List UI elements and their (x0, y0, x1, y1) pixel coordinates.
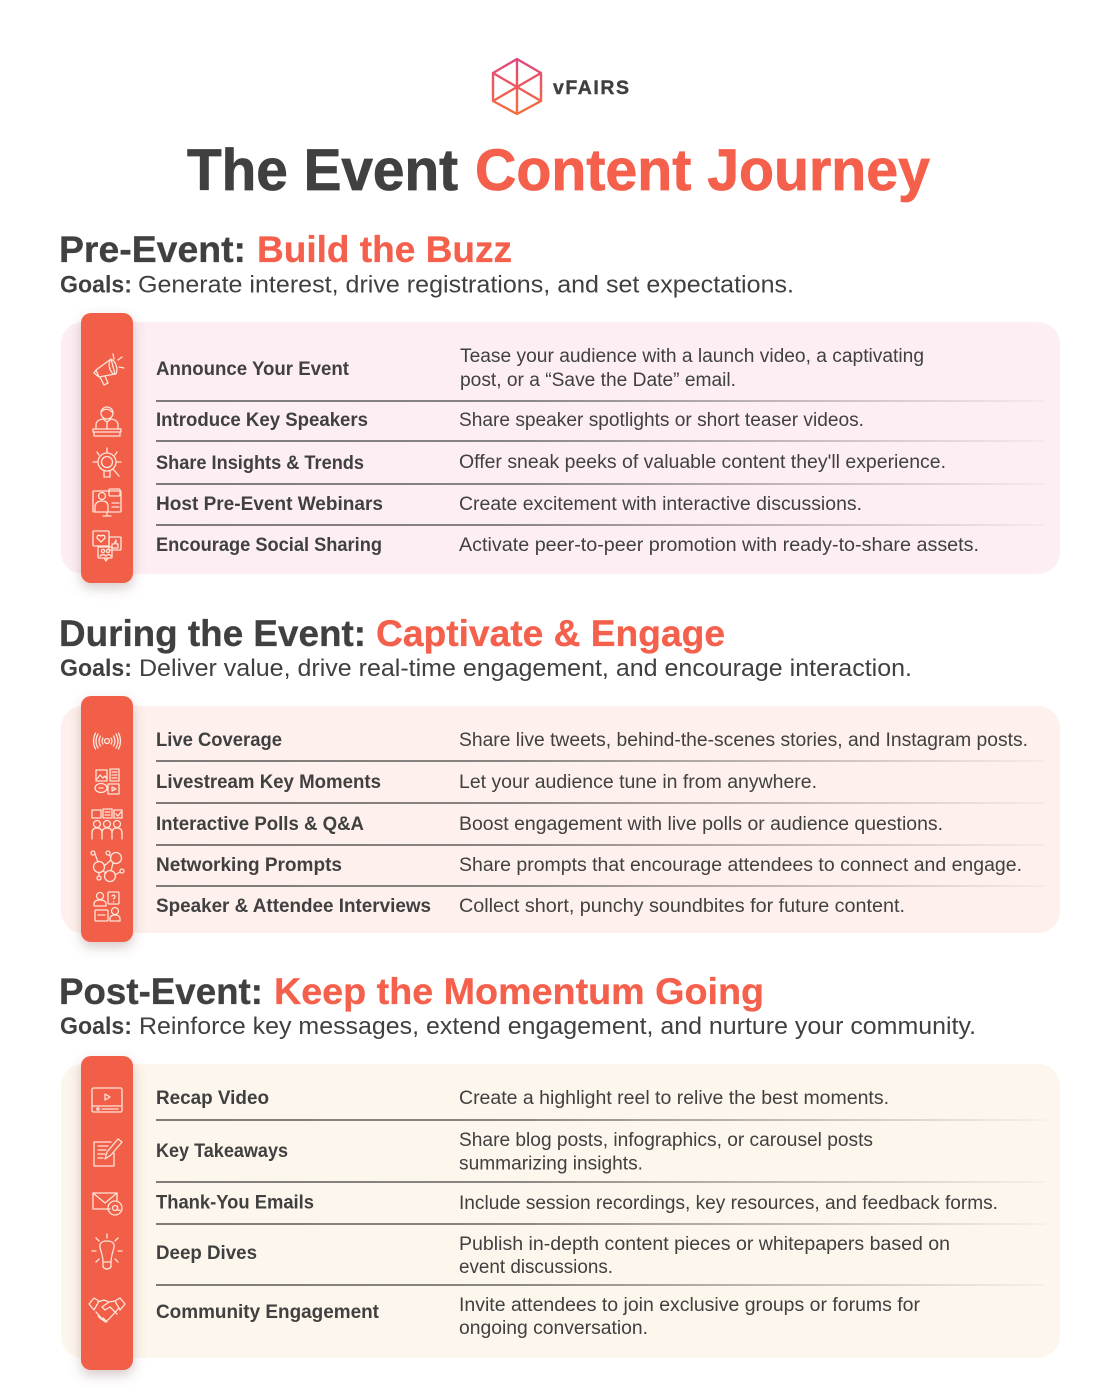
row: announce your event: post, or a “Save the Date” email. (460, 370, 736, 391)
row: recap video: Create a highlight reel to relive the best moments. (459, 1088, 889, 1109)
row: interactive polls: Boost engagement with live polls or audience questions. (459, 814, 943, 835)
goals: pre-event: Generate interest, drive registrations, and set expectations. (138, 272, 794, 298)
icon: recap video (92, 1088, 122, 1112)
icon: insight bulb (93, 448, 121, 477)
row: community engagement: Community Engagement (156, 1302, 380, 1323)
row: share insights and trends: Share Insights & Trends (156, 453, 364, 474)
panel: pre-event (61, 313, 1060, 583)
row: encourage social sharing (156, 535, 979, 556)
section heading: post-event: Post-Event: (59, 971, 263, 1012)
section heading: during the event: During the Event: (59, 613, 366, 654)
row: livestream key moments: Let your audience tune in from anywhere. (459, 772, 817, 793)
section heading: post-event: Keep the Momentum Going (274, 971, 764, 1012)
row: live coverage (156, 730, 1028, 751)
row: speaker and attendee interviews: Collect short, punchy soundbites for future content. (459, 896, 905, 917)
icon: webinar screen (93, 489, 121, 516)
row: thank-you emails: Thank-You Emails (156, 1192, 314, 1214)
row: announce your event: Tease your audience with a launch video, a captivating (460, 346, 924, 367)
row: introduce key speakers: Introduce Key Speakers (156, 410, 368, 431)
icon: speaker interviews (94, 892, 120, 921)
row: livestream key moments (156, 772, 817, 793)
row: networking prompts: Share prompts that encourage attendees to connect and engage. (459, 855, 1022, 876)
goals: pre-event: Goals: (60, 272, 132, 298)
icon: social sharing (93, 531, 121, 561)
icon: megaphone (94, 354, 124, 385)
row: live coverage: Live Coverage (156, 730, 282, 751)
row: deep dives: Deep Dives (156, 1243, 257, 1264)
icon: hexagon logo mark (493, 59, 541, 114)
logo: vFairs (493, 59, 629, 114)
icon bar (81, 696, 133, 942)
icon: polls and audience (92, 809, 122, 839)
row: key takeaways (156, 1130, 873, 1174)
goals: post-event: Goals: (60, 1013, 132, 1040)
icon: email (93, 1193, 122, 1215)
icon: handshake (89, 1298, 125, 1322)
icon: live broadcast signal (94, 733, 120, 749)
row: deep dives: event discussions. (459, 1257, 613, 1278)
icon: light bulb (92, 1234, 122, 1269)
row: thank-you emails (156, 1192, 998, 1214)
row: livestream key moments: Livestream Key Moments (156, 772, 381, 793)
section heading: pre-event: Build the Buzz (257, 229, 512, 270)
panel: during the event (61, 696, 1060, 942)
icon: networking (91, 851, 124, 882)
row: introduce key speakers: Share speaker spotlights or short teaser videos. (459, 410, 864, 431)
row: host pre-event webinars: Host Pre-Event Webinars (156, 494, 383, 515)
title: Content Journey (475, 138, 930, 203)
panel background (61, 322, 1060, 574)
goals: during the event: Deliver value, drive real-time engagement, and encourage interaction. (139, 655, 912, 682)
title: The Event (187, 138, 458, 203)
row: host pre-event webinars: Create excitement with interactive discussions. (459, 494, 862, 515)
row: key takeaways: summarizing insights. (459, 1154, 643, 1174)
icon: livestream media tiles (95, 769, 119, 794)
row: interactive polls: Interactive Polls & Q&A (156, 814, 364, 835)
goals: post-event: Reinforce key messages, extend engagement, and nurture your community. (139, 1013, 976, 1040)
row: interactive polls (156, 814, 943, 835)
icon: speaker at podium (93, 407, 121, 436)
icon bar (81, 313, 133, 583)
row: key takeaways: Share blog posts, infographics, or carousel posts (459, 1130, 873, 1151)
row: key takeaways: Key Takeaways (156, 1141, 288, 1162)
row: encourage social sharing: Activate peer-to-peer promotion with ready-to-share assets. (459, 535, 979, 556)
row: announce your event (156, 346, 924, 391)
goals: during the event: Goals: (60, 655, 132, 682)
title (187, 138, 930, 203)
section heading: during the event: Captivate & Engage (376, 613, 725, 654)
row: thank-you emails: Include session recordings, key resources, and feedback forms. (459, 1193, 998, 1214)
row: encourage social sharing: Encourage Social Sharing (156, 535, 382, 556)
row: community engagement: ongoing conversation. (459, 1318, 648, 1339)
icon: notes and pencil (94, 1139, 122, 1166)
row: speaker and attendee interviews: Speaker & Attendee Interviews (156, 896, 431, 917)
section heading: during the event (59, 613, 725, 654)
row: recap video: Recap Video (156, 1088, 269, 1109)
panel background (61, 1064, 1060, 1358)
row: deep dives: Publish in-depth content pieces or whitepapers based on (459, 1234, 950, 1255)
icon bar (81, 1056, 133, 1370)
row: recap video (156, 1088, 889, 1109)
row: networking prompts: Networking Prompts (156, 855, 342, 876)
row: deep dives (156, 1234, 950, 1278)
row: announce your event: Announce Your Event (156, 359, 350, 380)
row: community engagement: Invite attendees to join exclusive groups or forums for (459, 1295, 921, 1316)
row: networking prompts (156, 855, 1022, 876)
row: introduce key speakers (156, 410, 864, 431)
section heading: pre-event: Pre-Event: (59, 229, 246, 270)
row: share insights and trends (156, 452, 946, 474)
row: host pre-event webinars (156, 494, 862, 515)
row: community engagement (156, 1295, 921, 1339)
section heading: pre-event (59, 229, 512, 270)
logo wordmark: vFAIRS (553, 77, 629, 99)
row: share insights and trends: Offer sneak peeks of valuable content they'll experience. (459, 452, 946, 473)
panel background (61, 706, 1060, 933)
row: speaker and attendee interviews (156, 896, 905, 917)
section heading: post-event (59, 971, 764, 1012)
row: live coverage: Share live tweets, behind-the-scenes stories, and Instagram posts. (459, 730, 1028, 751)
panel: post-event (61, 1056, 1060, 1370)
